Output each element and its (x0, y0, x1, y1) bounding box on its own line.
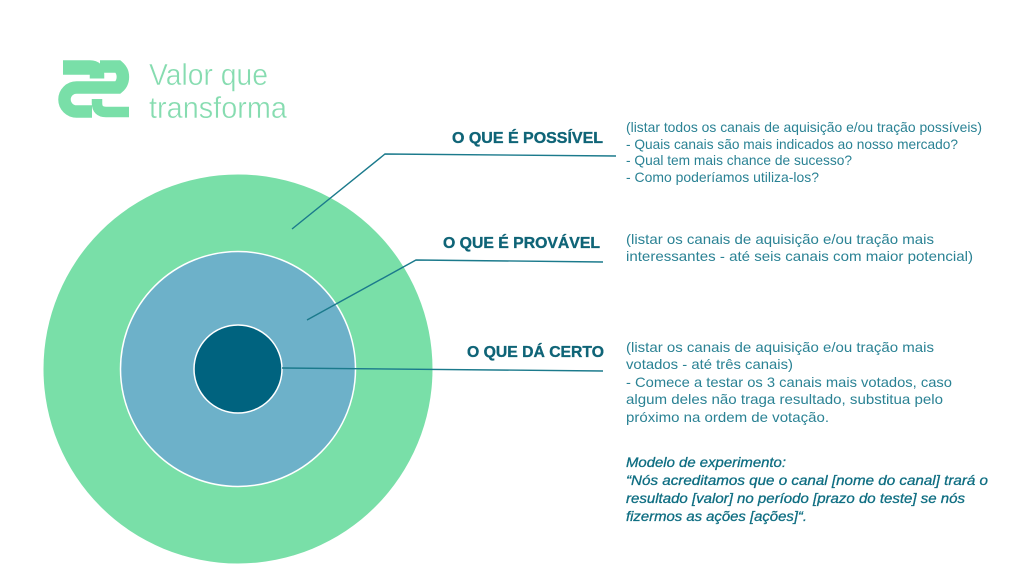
text block: possible (626, 119, 982, 185)
heading: probable: O QUE É PROVÁVEL (443, 233, 600, 252)
text block: possible: (listar todos os canais de aquisição e/ou tração possíveis) (626, 119, 982, 135)
logo wordmark (149, 57, 288, 125)
concentric circles diagram (44, 174, 432, 564)
text block: possible: - Qual tem mais chance de sucesso? (626, 152, 852, 168)
text block: what works: votados - até três canais) (626, 356, 793, 372)
text block: what works: - Comece a testar os 3 canais mais votados, caso (626, 374, 952, 390)
text block: experiment model: resultado [valor] no período [prazo do teste] se nós (626, 490, 965, 506)
text block: possible: - Quais canais são mais indicados ao nosso mercado? (626, 136, 958, 152)
icon: logo mark (63, 66, 129, 112)
text block: probable: interessantes - até seis canais com maior potencial) (626, 248, 973, 264)
inner circle: what works (194, 325, 282, 413)
text block: experiment model (626, 454, 988, 524)
leader line: what works (282, 368, 603, 371)
logo wordmark: transforma (149, 90, 288, 125)
text block: what works: algum deles não traga resultado, substitua pelo (626, 391, 943, 407)
text block: what works: próximo na ordem de votação. (626, 409, 829, 425)
leader line: probable (307, 260, 603, 320)
text block: experiment model: “Nós acreditamos que o canal [nome do canal] trará o (626, 472, 988, 488)
logo wordmark: Valor que (149, 57, 268, 92)
text block: probable: (listar os canais de aquisição e/ou tração mais (626, 231, 934, 247)
text block: possible: - Como poderíamos utiliza-los? (626, 169, 819, 185)
text block: experiment model: Modelo de experimento: (626, 454, 786, 470)
logo (63, 57, 288, 125)
middle circle: probable (120, 252, 356, 486)
outer circle: possible (44, 174, 432, 564)
text block: experiment model: fizermos as ações [ações]“. (626, 508, 807, 524)
leader line: possible (292, 154, 616, 229)
text block: what works: (listar os canais de aquisição e/ou tração mais (626, 339, 934, 355)
text block: what works (626, 339, 952, 425)
heading: possible: O QUE É POSSÍVEL (452, 128, 603, 147)
heading: what works: O QUE DÁ CERTO (467, 342, 604, 361)
text block: probable (626, 231, 973, 264)
